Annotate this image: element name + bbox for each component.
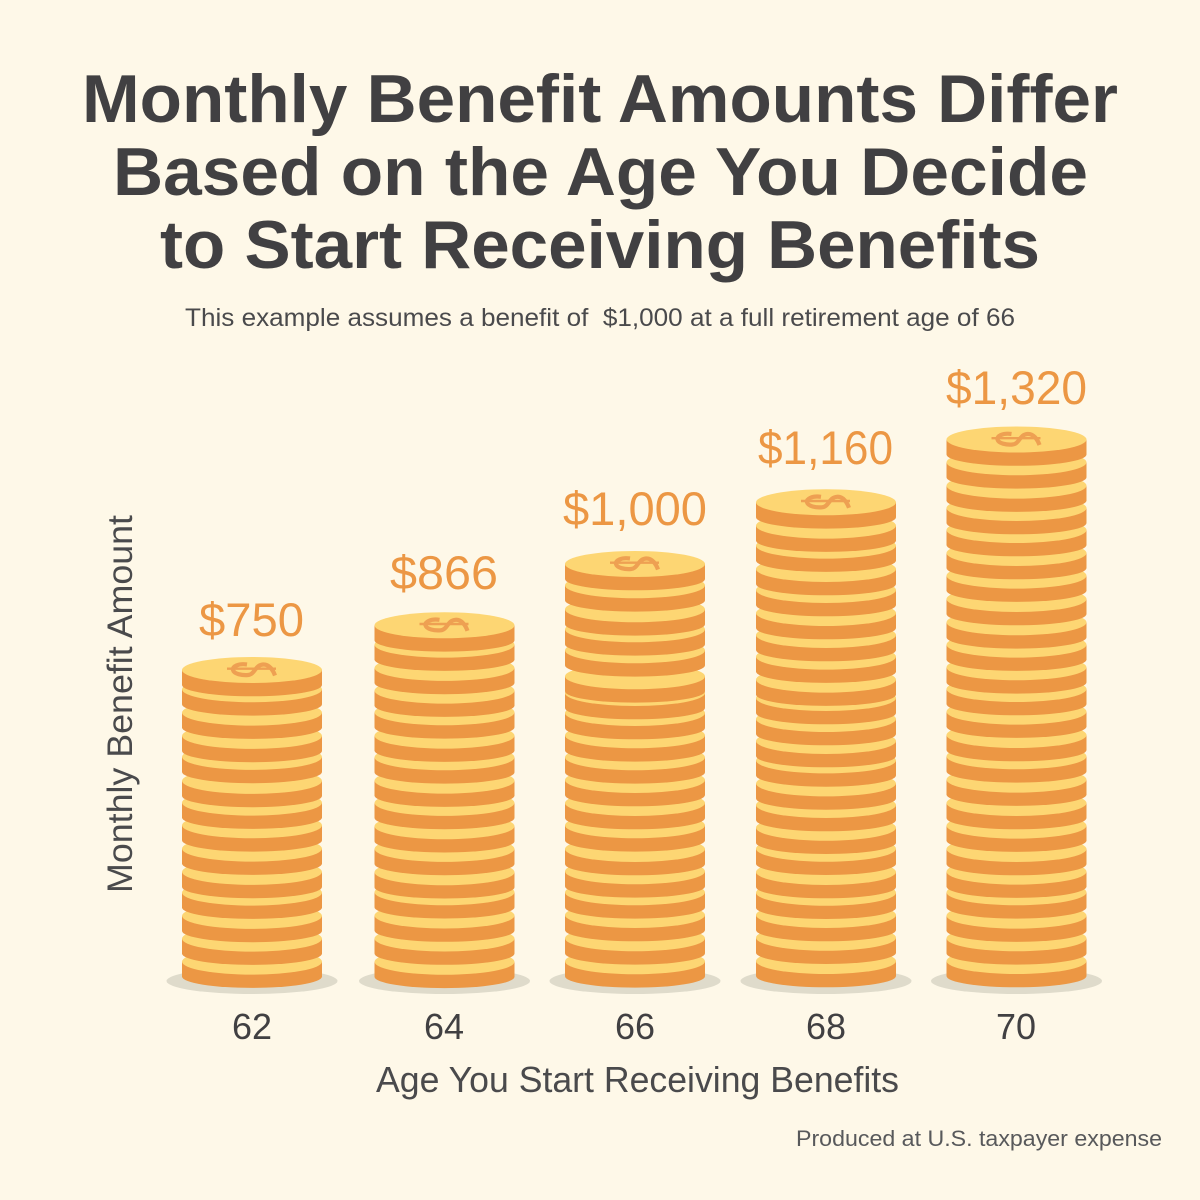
value labels: $1,320 — [946, 361, 1087, 414]
stack: age 64 — [359, 612, 530, 994]
stack: age 62 — [166, 657, 338, 994]
x-axis label: Age You Start Receiving Benefits — [376, 1059, 899, 1100]
chart: coin stacks — [166, 426, 1102, 994]
stack: age 68 — [740, 489, 912, 994]
age labels: 62 — [232, 1006, 272, 1047]
value labels — [199, 361, 1087, 646]
age labels: 68 — [806, 1006, 846, 1047]
subtitle: This example assumes a benefit of $1,000 at a full retirement age of 66 — [185, 304, 1015, 332]
age labels: 66 — [615, 1006, 655, 1047]
title — [82, 61, 1118, 283]
footer note: Produced at U.S. taxpayer expense — [796, 1126, 1162, 1151]
value labels: $750 — [199, 593, 304, 646]
stack: age 66 — [550, 551, 720, 994]
age labels — [232, 1006, 1036, 1047]
value labels: $866 — [390, 546, 498, 599]
age labels: 64 — [424, 1006, 464, 1047]
age labels: 70 — [996, 1006, 1036, 1047]
value labels: $1,000 — [563, 482, 707, 535]
title: Monthly Benefit Amounts Differ — [82, 61, 1118, 137]
title: to Start Receiving Benefits — [160, 207, 1040, 283]
value labels: $1,160 — [758, 421, 893, 474]
stack: age 70 — [931, 426, 1102, 994]
y-axis label: Monthly Benefit Amount — [101, 515, 140, 893]
title: Based on the Age You Decide — [113, 134, 1088, 210]
